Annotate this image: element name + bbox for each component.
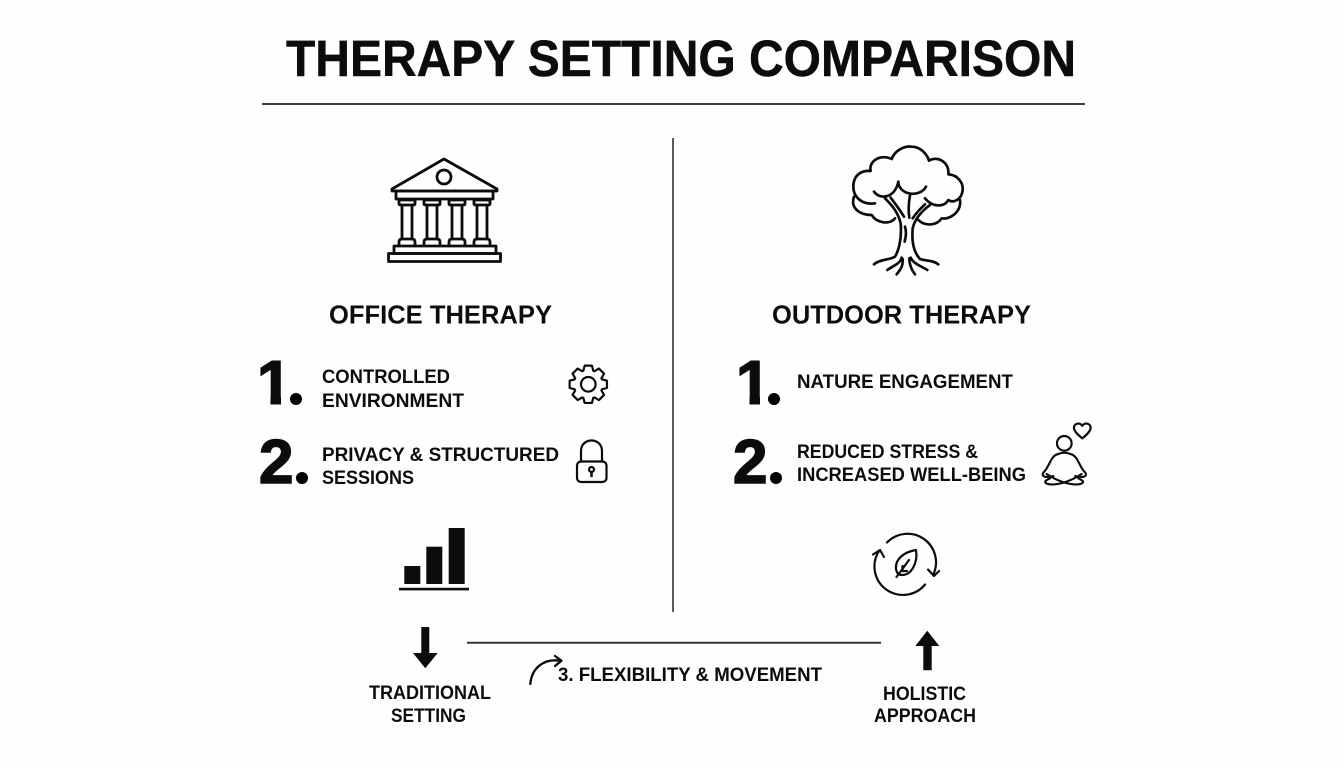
- arrow: down: [413, 627, 438, 668]
- heading: office therapy: OFFICE THERAPY: [329, 300, 552, 330]
- label: traditional setting: SETTING: [391, 705, 466, 727]
- label: holistic approach: [874, 683, 976, 727]
- icon: gear: [570, 366, 607, 403]
- icon: bar chart: [399, 528, 469, 590]
- item 1: controlled environment: [260, 360, 464, 407]
- arrow: curved to flexibility: [530, 656, 562, 684]
- item 2: reduced stress and increased well-being: INCREASED WELL-BEING: [797, 464, 1026, 486]
- item 2: privacy and structured sessions: SESSIONS: [322, 467, 414, 489]
- panel: outdoor therapy: [733, 147, 1091, 727]
- label: holistic approach: APPROACH: [874, 705, 976, 727]
- item 2: privacy and structured sessions: PRIVACY & STRUCTURED: [322, 444, 559, 466]
- item 1: controlled environment: 1.: [257, 349, 309, 418]
- label: traditional setting: TRADITIONAL: [369, 682, 491, 704]
- item 2: reduced stress and increased well-being: 2.: [733, 428, 785, 497]
- heading: outdoor therapy: OUTDOOR THERAPY: [772, 300, 1031, 330]
- icon: tree: [853, 147, 963, 274]
- item 1: nature engagement: 1.: [736, 349, 788, 418]
- text: flexibility and movement: 3. FLEXIBILITY & MOVEMENT: [558, 664, 822, 686]
- panel: office therapy: [257, 159, 607, 727]
- item 2: reduced stress and increased well-being: [733, 428, 1026, 497]
- label: traditional setting: [369, 682, 491, 727]
- item 1: nature engagement: NATURE ENGAGEMENT: [797, 371, 1013, 393]
- label: holistic approach: HOLISTIC: [883, 683, 966, 705]
- icon: padlock: [577, 440, 606, 482]
- item 2: privacy and structured sessions: [259, 428, 559, 497]
- item 1: controlled environment: ENVIRONMENT: [322, 390, 464, 412]
- item 1: controlled environment: CONTROLLED: [322, 366, 450, 388]
- icon: meditating person with heart: [1043, 424, 1091, 484]
- icon: leaf in cycle arrows: [873, 534, 939, 595]
- item 1: nature engagement: [739, 360, 1013, 405]
- title: THERAPY SETTING COMPARISON: [286, 30, 1076, 87]
- arrow: up: [915, 631, 939, 670]
- item 2: privacy and structured sessions: 2.: [259, 428, 311, 497]
- icon: classical building: [388, 159, 500, 262]
- item 2: reduced stress and increased well-being: REDUCED STRESS &: [797, 441, 978, 463]
